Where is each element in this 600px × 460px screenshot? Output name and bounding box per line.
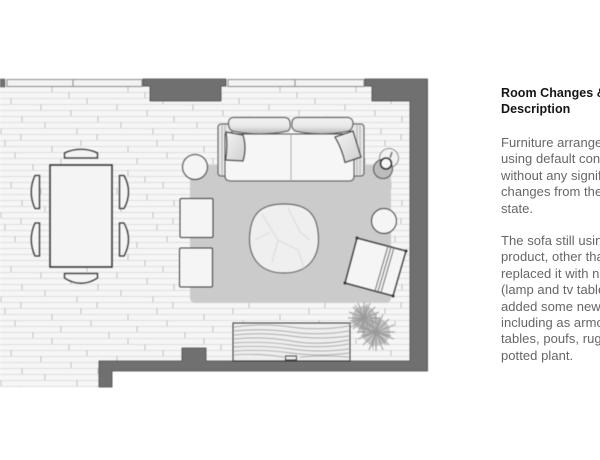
sofa back cushion: right [292, 118, 353, 134]
dining table [50, 165, 112, 267]
sofa seat [225, 134, 354, 181]
marble coffee table [250, 204, 318, 273]
pouf: lower [180, 248, 212, 287]
dining chair: right upper [120, 176, 128, 208]
wall pillar: top middle [143, 79, 226, 101]
sofa arm: right [350, 124, 364, 176]
throw pillow: right [335, 131, 361, 162]
floor lamp [374, 148, 398, 178]
dining chair: left upper [31, 176, 40, 208]
potted plant [348, 302, 395, 351]
heading [501, 86, 600, 116]
dining chair: left lower [31, 223, 40, 256]
pouf: upper [180, 198, 213, 238]
walls: right and bottom [99, 79, 428, 387]
paragraph: arrangement: state. [501, 201, 533, 216]
heading: Description [501, 102, 570, 116]
sofa back cushion: left [228, 118, 290, 134]
paragraph: arrangement [501, 135, 600, 216]
dining chair: top [64, 149, 98, 158]
dining chair: right lower [120, 223, 128, 256]
dining chair: bottom [64, 274, 98, 283]
round side table: left [182, 154, 208, 180]
tv table socket [286, 356, 296, 360]
throw pillow: left [226, 132, 245, 161]
wall stub: top left [0, 79, 5, 87]
right window [228, 79, 364, 87]
description text column [501, 86, 600, 363]
sofa arm: left [218, 124, 232, 176]
paragraph: sofa and new items: potted plant. [501, 348, 573, 363]
rug [190, 165, 391, 303]
floor planks [0, 86, 410, 387]
sofa [218, 118, 364, 181]
tv table [233, 323, 350, 361]
round side table: right [372, 208, 396, 234]
left window [7, 79, 142, 87]
paragraph: sofa and new items [501, 233, 600, 363]
armchair [344, 236, 408, 298]
